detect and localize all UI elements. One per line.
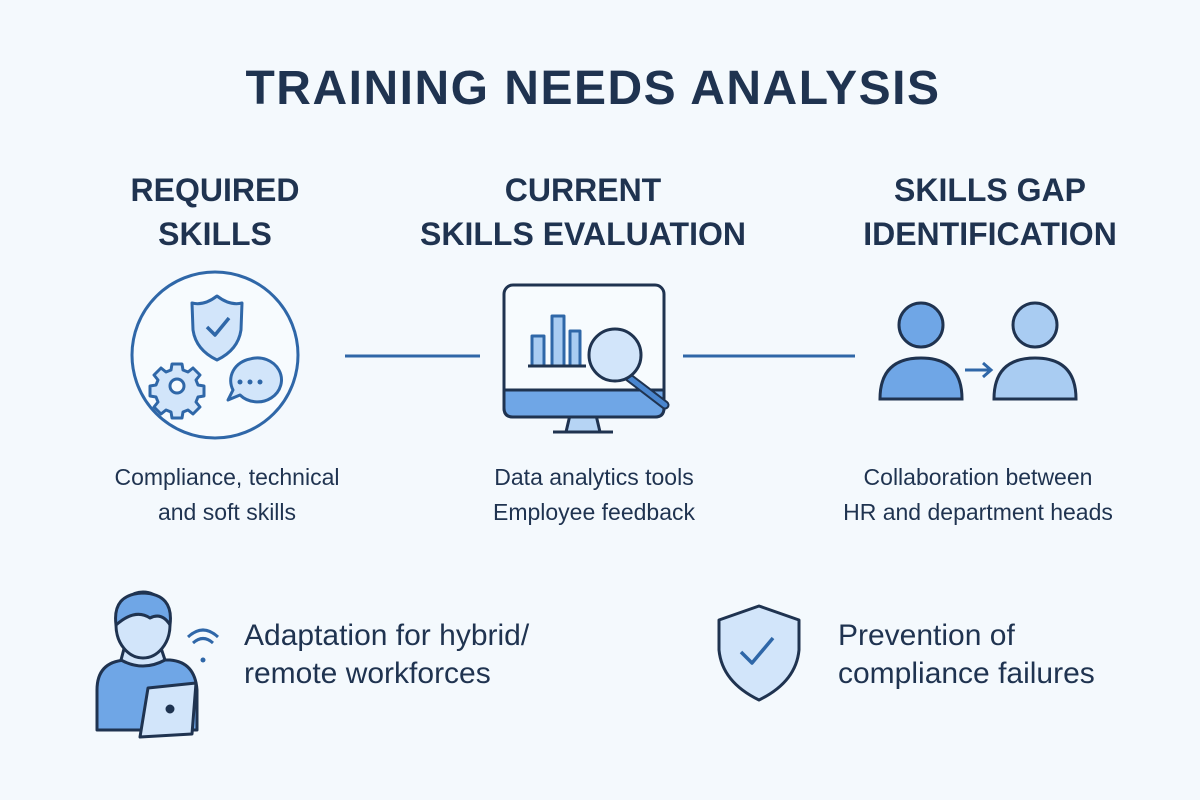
caption: current evaluation: Data analytics tools (494, 464, 694, 490)
heading: required skills (131, 172, 299, 252)
icon: required skills circle (132, 272, 298, 438)
caption: gap identification (843, 464, 1113, 525)
text: prevention (838, 619, 1095, 690)
title: TRAINING NEEDS ANALYSIS (245, 62, 941, 115)
heading: current skills evaluation: CURRENT (505, 172, 662, 208)
text: adaptation (244, 619, 530, 690)
heading: current skills evaluation (420, 172, 746, 252)
text: adaptation: remote workforces (244, 657, 491, 690)
heading: current skills evaluation: SKILLS EVALUATION (420, 216, 746, 252)
caption: current evaluation (493, 464, 696, 525)
heading: skills gap identification: SKILLS GAP (894, 172, 1086, 208)
caption: required skills: Compliance, technical (114, 464, 340, 490)
heading: skills gap identification: IDENTIFICATION (863, 216, 1117, 252)
icon: two people with arrow (880, 303, 1076, 399)
heading: skills gap identification (863, 172, 1117, 252)
caption: current evaluation: Employee feedback (493, 499, 696, 525)
heading: required skills: REQUIRED (131, 172, 299, 208)
heading: required skills: SKILLS (158, 216, 272, 252)
caption: gap identification: Collaboration between (864, 464, 1092, 490)
connector line 2 (683, 354, 855, 358)
connector line 1 (345, 354, 480, 358)
text: adaptation: Adaptation for hybrid/ (244, 619, 530, 652)
text: prevention: compliance failures (838, 657, 1095, 690)
caption: required skills (114, 464, 340, 525)
caption: required skills: and soft skills (158, 499, 296, 525)
icon: monitor with chart (504, 285, 665, 432)
icon: remote worker (97, 592, 218, 737)
text: prevention: Prevention of (838, 619, 1015, 652)
icon: shield check (719, 606, 799, 700)
caption: gap identification: HR and department heads (843, 499, 1113, 525)
